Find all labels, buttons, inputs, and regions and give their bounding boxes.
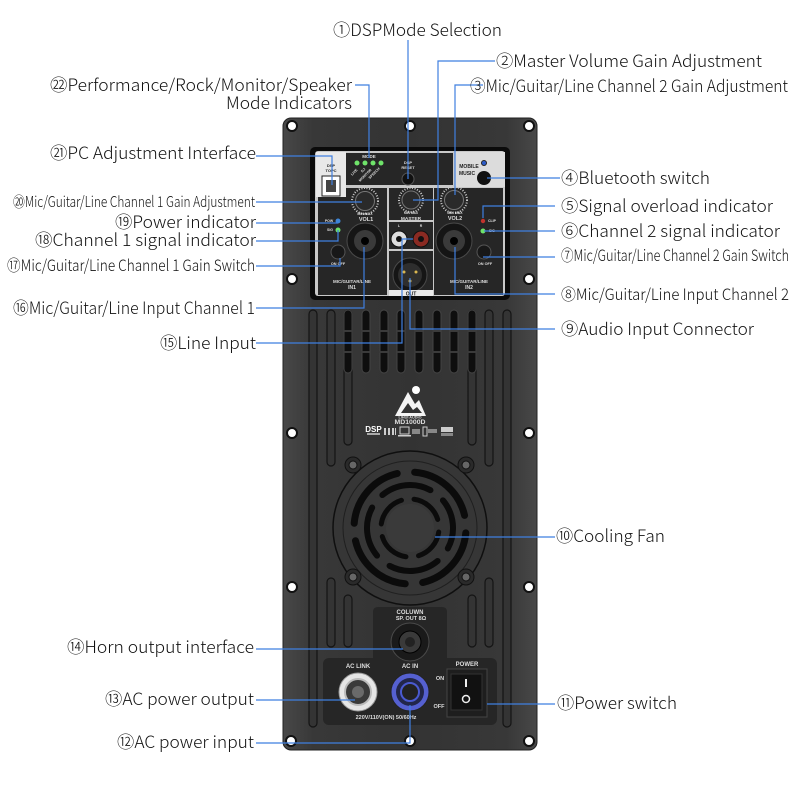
voltage label: 220V/110V(ON) 50/60Hz (356, 715, 417, 721)
label 9: audio input connector: ⑨Audio Input Connector (561, 315, 755, 340)
speaker output recess (373, 607, 447, 660)
channel 1 section: POW (325, 219, 334, 223)
label 22: mode indicators: Mode Indicators (226, 89, 352, 114)
label 22: mode indicators (50, 71, 353, 114)
bluetooth section (455, 152, 505, 187)
RCA line input section: R (420, 224, 423, 228)
label 1: DSP mode selection: ①DSPMode Selection (333, 16, 502, 41)
XLR output section: OUT (406, 292, 416, 298)
XLR output section (389, 251, 433, 298)
lower connector recess (323, 658, 497, 725)
column label (396, 610, 427, 622)
label 16: input channel 1: ⑯Mic/Guitar/Line Input Channel 1 (13, 294, 255, 319)
control section frame (310, 147, 510, 300)
column label: SP. OUT 8Ω (396, 616, 427, 622)
bluetooth section: MOBILE (459, 164, 479, 170)
channel 2 section: SIG (489, 229, 495, 233)
label 11: power switch: ⑪Power switch (557, 689, 677, 714)
mode section: MODE (362, 154, 376, 159)
label 14: horn output: ⑭Horn output interface (67, 633, 254, 658)
channel 2 section: VOL2 (448, 216, 462, 222)
leader lines (256, 40, 560, 743)
RCA line input section: L (398, 224, 401, 228)
label 20: channel 1 gain adjustment: ⑳Mic/Guitar/Line Channel 1 Gain Adjustment (13, 191, 256, 212)
label 15: line input: ⑮Line Input (160, 329, 256, 354)
channel 1 section: MIC/GUITAR/LINE (333, 279, 371, 284)
label 17: channel 1 gain switch: ⑰Mic/Guitar/Line Channel 1 Gain Switch (7, 252, 255, 276)
panel: amplifier plate (283, 118, 537, 750)
label 10: cooling fan: ⑩Cooling Fan (556, 522, 665, 547)
USB PC port: DSP (327, 163, 335, 168)
label 18: channel 1 signal indicator: ⑱Channel 1 signal indicator (35, 226, 257, 251)
bluetooth section: MUSIC (459, 171, 475, 177)
feature badges (365, 425, 453, 436)
label 22: mode indicators: ㉒Performance/Rock/Monitor/Speaker (50, 71, 353, 96)
logo: mountain mark (394, 386, 426, 426)
mode section: MONITOR (358, 168, 373, 183)
label 6: channel 2 signal: ⑥Channel 2 signal indicator (561, 217, 781, 242)
ventilation slots (309, 310, 511, 727)
label 13: AC power output: ⑬AC power output (105, 685, 254, 710)
channel 1 section: SIG (327, 228, 333, 232)
logo: mountain mark: LIHUI AUDIO (398, 416, 422, 420)
channel 1 section: VOL1 (359, 217, 373, 223)
label 2: master volume: ②Master Volume Gain Adjustment (496, 47, 762, 72)
power switch: POWER (456, 662, 479, 668)
channel 1 section: MIN MAX (357, 212, 373, 216)
speakon output connector (391, 623, 429, 661)
plate body (283, 118, 537, 750)
label 4: bluetooth switch: ④Bluetooth switch (561, 164, 710, 189)
channel 2 section: IN2 (465, 285, 473, 291)
channel 2 section (434, 187, 503, 295)
mode section: SPEECH (368, 166, 381, 180)
channel 1 section (318, 188, 387, 295)
USB PC port (316, 152, 346, 197)
power switch: ON (436, 676, 444, 682)
mode section: DJ (360, 167, 366, 173)
channel 2 section: ON OFF (478, 262, 493, 266)
RCA line input section (389, 222, 433, 249)
label 5: signal overload: ⑤Signal overload indicator (561, 192, 774, 217)
label 19: power indicator: ⑲Power indicator (115, 208, 257, 233)
AC in connector: AC IN (402, 664, 418, 670)
AC link connector (339, 664, 377, 711)
mode section (346, 153, 453, 185)
channel 2 section: MIC/GUITAR/LINE (450, 279, 488, 284)
mode section: RESET (401, 165, 415, 170)
channel 1 section: IN1 (348, 285, 356, 291)
label 21: PC interface: ㉑PC Adjustment Interface (50, 139, 256, 164)
fan screws (345, 457, 474, 585)
AC link connector: AC LINK (346, 664, 371, 670)
channel 2 section: MIN MAX (447, 211, 463, 215)
column label: COLUWN (396, 610, 424, 616)
channel 1 section: ON OFF (331, 262, 346, 266)
fan grille (333, 451, 487, 605)
feature badges: DSP (365, 425, 382, 434)
control section silver backing (315, 151, 505, 296)
master section (389, 188, 433, 222)
power switch: OFF (434, 704, 445, 710)
master section: MIN MAX (404, 211, 419, 215)
AC in connector (391, 664, 429, 711)
master section: MASTER (401, 216, 422, 222)
label 12: AC power input: ⑫AC power input (117, 728, 254, 753)
power switch (434, 662, 487, 717)
mode section: DSP (404, 160, 412, 165)
channel 2 section: CLIP (488, 219, 497, 223)
mounting holes (286, 121, 534, 746)
logo: mountain mark: MD1000D (394, 419, 426, 426)
mode section: LIVE (350, 168, 359, 176)
label 8: input channel 2: ⑧Mic/Guitar/Line Input Channel 2 (561, 281, 789, 305)
USB PC port: TOPC (325, 168, 337, 173)
